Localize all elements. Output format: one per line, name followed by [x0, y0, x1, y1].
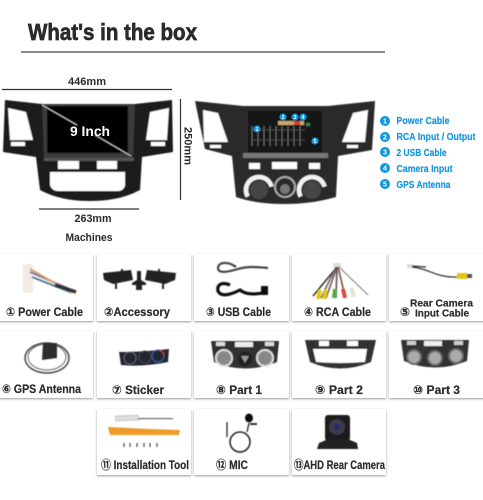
card: part 1 — [194, 331, 289, 398]
card: AHD rear camera: ⑬AHD Rear Camera — [294, 458, 385, 472]
head unit front — [3, 100, 173, 201]
port legend: 2 — [383, 134, 387, 142]
card: part 3: ⑩ Part 3 — [413, 383, 460, 397]
card: GPS antenna: ⑥ GPS Antenna — [2, 382, 81, 396]
card: MIC: ⑫ MIC — [216, 458, 248, 472]
card: part 3 — [389, 331, 483, 398]
card: power cable — [0, 254, 93, 321]
card: accessory: ②Accessory — [104, 305, 170, 319]
card: power cable: ① Power Cable — [6, 305, 83, 319]
icon: brackets — [103, 269, 176, 290]
icon: USB cables — [218, 263, 268, 295]
card: accessory — [97, 254, 191, 321]
card: rear camera input cable: Rear Camera — [410, 298, 473, 310]
card: MIC — [194, 409, 289, 475]
card: AHD rear camera — [292, 409, 386, 475]
dimension: height 250mm: 250mm — [182, 127, 194, 165]
port legend: 3 — [383, 150, 387, 156]
port legend: GPS Antenna — [396, 180, 451, 191]
rear unit body — [195, 101, 375, 208]
card: rear camera input cable — [389, 254, 483, 321]
port legend: 1 — [383, 118, 387, 126]
numbered port badges: 4 — [302, 115, 305, 121]
card: GPS antenna — [0, 331, 93, 398]
port legend: 2 USB Cable — [396, 148, 447, 159]
port legend: Power Cable — [396, 116, 450, 127]
dimension: height 250mm — [180, 99, 194, 200]
numbered port badges — [253, 113, 319, 145]
diagram: head unit rear — [195, 101, 476, 208]
icon: tools — [108, 415, 180, 447]
dimension: width 263mm: 263mm — [74, 213, 112, 225]
caption: machines: Machines — [66, 232, 112, 244]
icon: part 3 — [401, 340, 469, 368]
icon: RCA cable — [313, 263, 368, 299]
card: rear camera input cable: Input Cable — [415, 308, 469, 320]
icon: power cable — [23, 264, 76, 293]
card: sticker — [97, 331, 191, 398]
card: RCA cable: ④ RCA Cable — [304, 305, 371, 319]
dimension: width 263mm — [39, 209, 139, 225]
card: USB cable — [194, 254, 289, 321]
card: rear camera input cable: ⑤ — [400, 305, 410, 319]
numbered port badges: 2 — [282, 115, 285, 121]
icon: camera input cable — [407, 264, 472, 279]
card: sticker: ⑦ Sticker — [112, 383, 164, 397]
card: installation tool: ⑪ Installation Tool — [101, 458, 189, 472]
port legend: Camera Input — [396, 164, 453, 175]
numbered port badges: 3 — [294, 115, 297, 121]
port legend: 4 — [383, 166, 387, 172]
icon: sticker — [119, 349, 169, 366]
icon: part 2 — [305, 340, 376, 368]
card: installation tool — [97, 409, 191, 475]
screen size label: 9 Inch — [70, 124, 110, 139]
diagram: machine dimensions — [2, 76, 194, 244]
icon: part 1 — [211, 341, 279, 368]
card: USB cable: ③ USB Cable — [206, 305, 271, 319]
card: part 2: ⑨ Part 2 — [315, 383, 363, 397]
card: part 1: ⑧ Part 1 — [216, 383, 262, 397]
port legend — [380, 116, 476, 191]
numbered port badges: 5 — [314, 139, 317, 145]
title: What's in the box — [28, 19, 197, 45]
card: part 2 — [292, 331, 386, 398]
icon: microphone — [227, 414, 257, 452]
icon: rear camera — [317, 415, 358, 449]
card: RCA cable — [292, 254, 386, 321]
dimension: width 446mm: 446mm — [68, 76, 106, 88]
icon: GPS antenna — [25, 343, 69, 373]
port legend: 5 — [383, 182, 387, 188]
numbered port badges: 1 — [256, 127, 259, 133]
